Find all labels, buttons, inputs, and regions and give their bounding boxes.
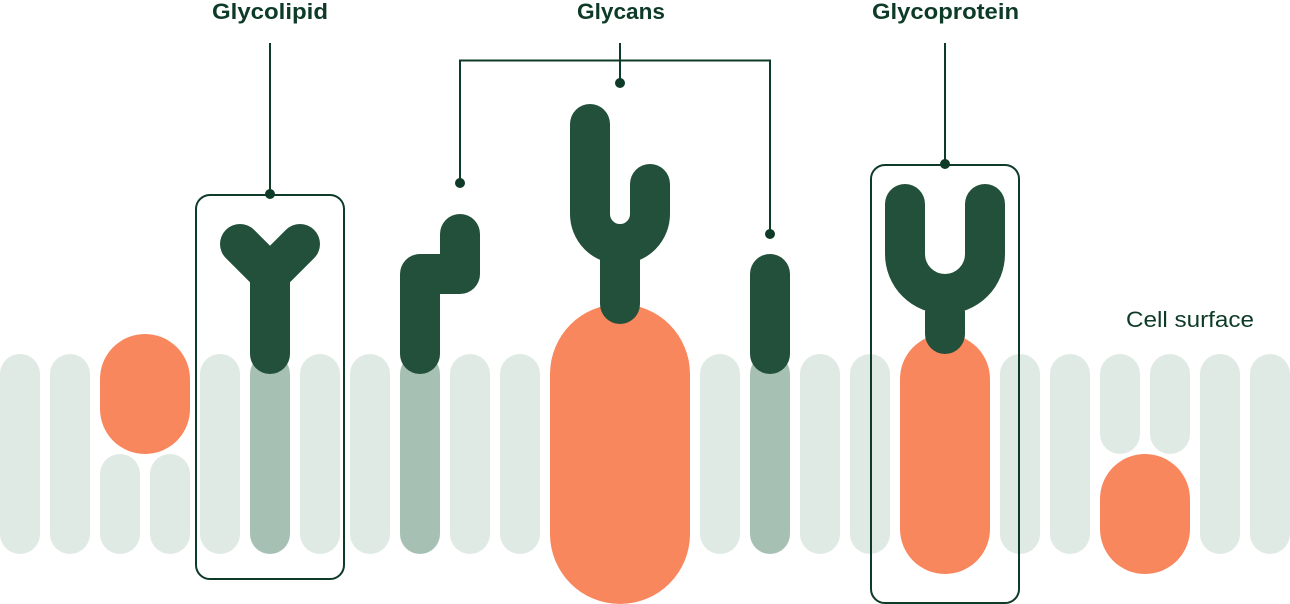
glycan chains	[240, 124, 985, 354]
glycan: glycolipid Y shape	[240, 244, 300, 354]
glycolipid outline box	[196, 195, 344, 579]
leader line: glycolipid	[265, 43, 275, 199]
label: Cell surface: Cell surface	[1126, 307, 1254, 332]
glycan: glycoprotein U shape	[905, 204, 985, 334]
anchor lipid columns	[250, 354, 790, 554]
glycan: straight chain	[750, 274, 790, 354]
leader lines: glycans	[455, 43, 775, 239]
membrane proteins	[100, 304, 1190, 604]
glycan: stepped chain	[420, 234, 460, 354]
membrane lipid columns	[0, 354, 1290, 554]
glycoprotein outline box	[871, 165, 1019, 603]
leader line: glycoprotein	[940, 43, 950, 169]
glycan: branched chain on protein	[590, 124, 650, 304]
